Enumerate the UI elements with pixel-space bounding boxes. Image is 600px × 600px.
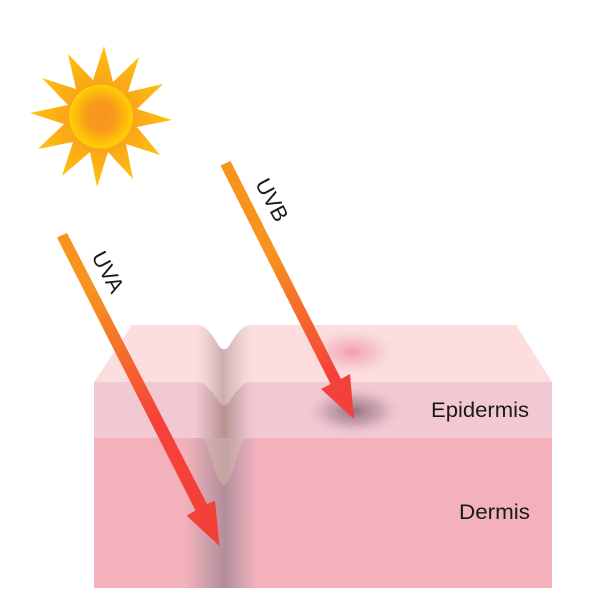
dark spot in epidermis (305, 386, 403, 436)
epidermis fold tip in dermis (197, 438, 251, 485)
label: UVB: UVB (250, 174, 294, 226)
sun rays (30, 46, 172, 187)
label: Dermis: Dermis (459, 501, 530, 524)
dermis fold shading (186, 438, 256, 588)
label: Epidermis: Epidermis (431, 399, 529, 422)
arrow: UVA (57, 233, 220, 546)
skin cross-section (94, 325, 552, 588)
surface fold shading (197, 325, 251, 406)
sun disc (69, 84, 133, 148)
layer: skin surface (94, 325, 552, 382)
epidermis fold shading (195, 382, 253, 438)
sunburn spot on surface (305, 327, 399, 377)
arrow: UVB (220, 161, 354, 419)
layer: epidermis (94, 382, 552, 438)
icon: sun (30, 46, 172, 187)
layer: dermis (94, 438, 552, 588)
label: UVA: UVA (87, 247, 129, 297)
